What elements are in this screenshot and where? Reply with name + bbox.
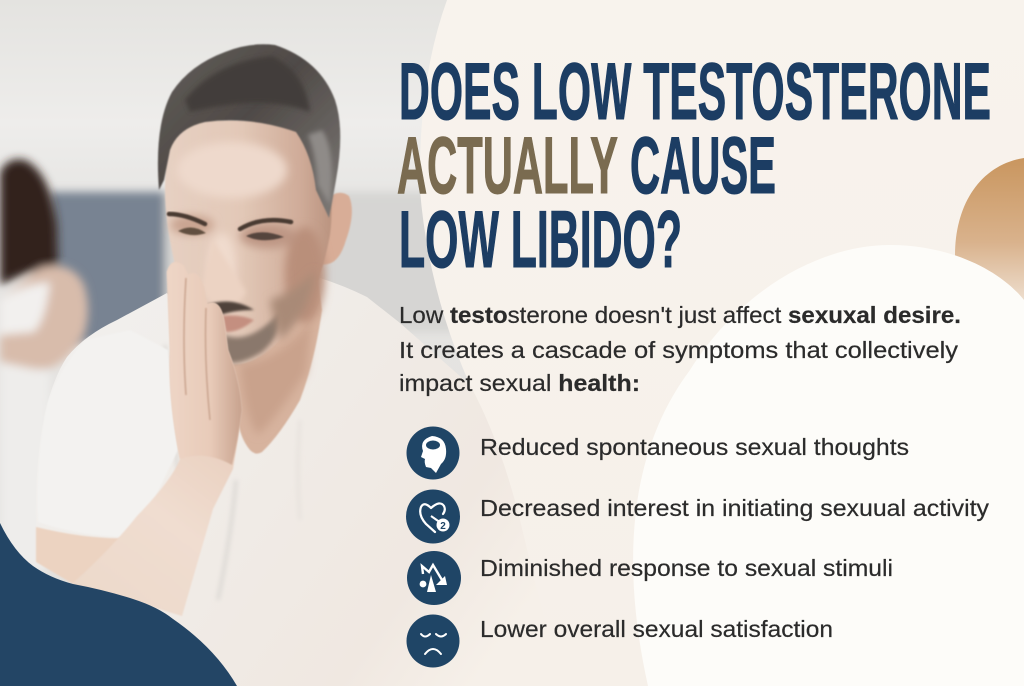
icon: heart with badge [406,490,460,544]
title: ACTUALLY [397,121,618,211]
icon: sad face [406,614,460,668]
decorative navy blob [0,523,237,686]
hair [158,44,340,218]
list item: decreased interest [406,490,990,544]
man's shirt [49,279,520,686]
nose [213,250,244,301]
blurred headboard [50,192,465,342]
finger lines [184,278,210,420]
darker hair top [185,56,310,112]
label: Lower overall sexual satisfaction [480,616,833,642]
title [397,47,991,285]
label: Reduced spontaneous sexual thoughts [480,434,909,460]
icon: heart with badge: 2 [440,521,446,532]
neck [233,292,322,454]
upper arm [36,526,118,586]
decorative white circle [633,245,1024,686]
photo: worried man with partner in background [0,0,520,686]
intro paragraph: It creates a cascade of symptoms that collectively [399,337,959,363]
hand and forearm [73,262,242,616]
eyebrows [169,214,291,229]
neck shadow [240,320,312,435]
title: LOW LIBIDO? [399,195,682,285]
blurred partner in background [0,159,88,570]
stubble [267,279,312,340]
fingers [167,262,242,465]
icon: head with brain [406,426,460,480]
title: CAUSE [630,121,776,211]
label: Decreased interest in initiating sexuual activity [480,495,990,521]
ear [320,193,352,264]
list item: reduced thoughts [406,426,909,480]
eyes [178,227,284,240]
grey temple hair [308,130,332,205]
shirt folds [164,346,238,598]
photo background wall [0,0,467,584]
sleeve [60,340,178,520]
list item: lower satisfaction [406,614,833,668]
face [165,120,332,364]
decorative tan circle [955,158,1024,345]
intro paragraph [399,302,961,396]
label: Diminished response to sexual stimuli [480,555,893,581]
list item: diminished response [407,551,893,605]
icon: falling arrow and drop [407,551,461,605]
background shape: beige panel [420,0,1024,686]
intro paragraph: Low testosterone doesn't just affect sexuxal desire. [399,302,961,328]
beard [224,312,280,363]
moustache and mouth [206,301,254,332]
forehead highlight and cheek shadow [170,142,325,323]
intro paragraph: impact sexual health: [399,370,640,396]
